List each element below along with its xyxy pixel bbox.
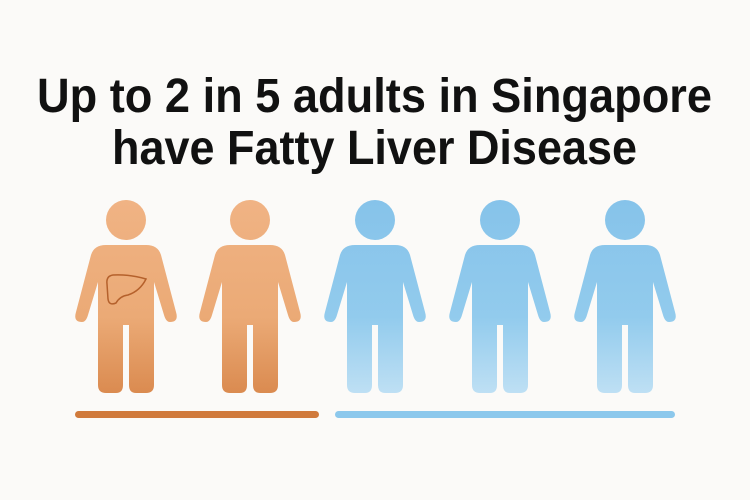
bar: orange group — [75, 411, 319, 418]
title — [37, 70, 712, 175]
figure 3: blue — [324, 200, 426, 393]
bar: blue group — [335, 411, 675, 418]
figure 2: orange — [199, 200, 301, 393]
figure 4: blue — [449, 200, 551, 393]
icon: liver — [107, 275, 146, 304]
title: Up to 2 in 5 adults in Singapore — [37, 70, 712, 123]
figure 5: blue — [574, 200, 676, 393]
figure 1: orange with liver — [75, 200, 177, 393]
title: have Fatty Liver Disease — [112, 122, 637, 175]
